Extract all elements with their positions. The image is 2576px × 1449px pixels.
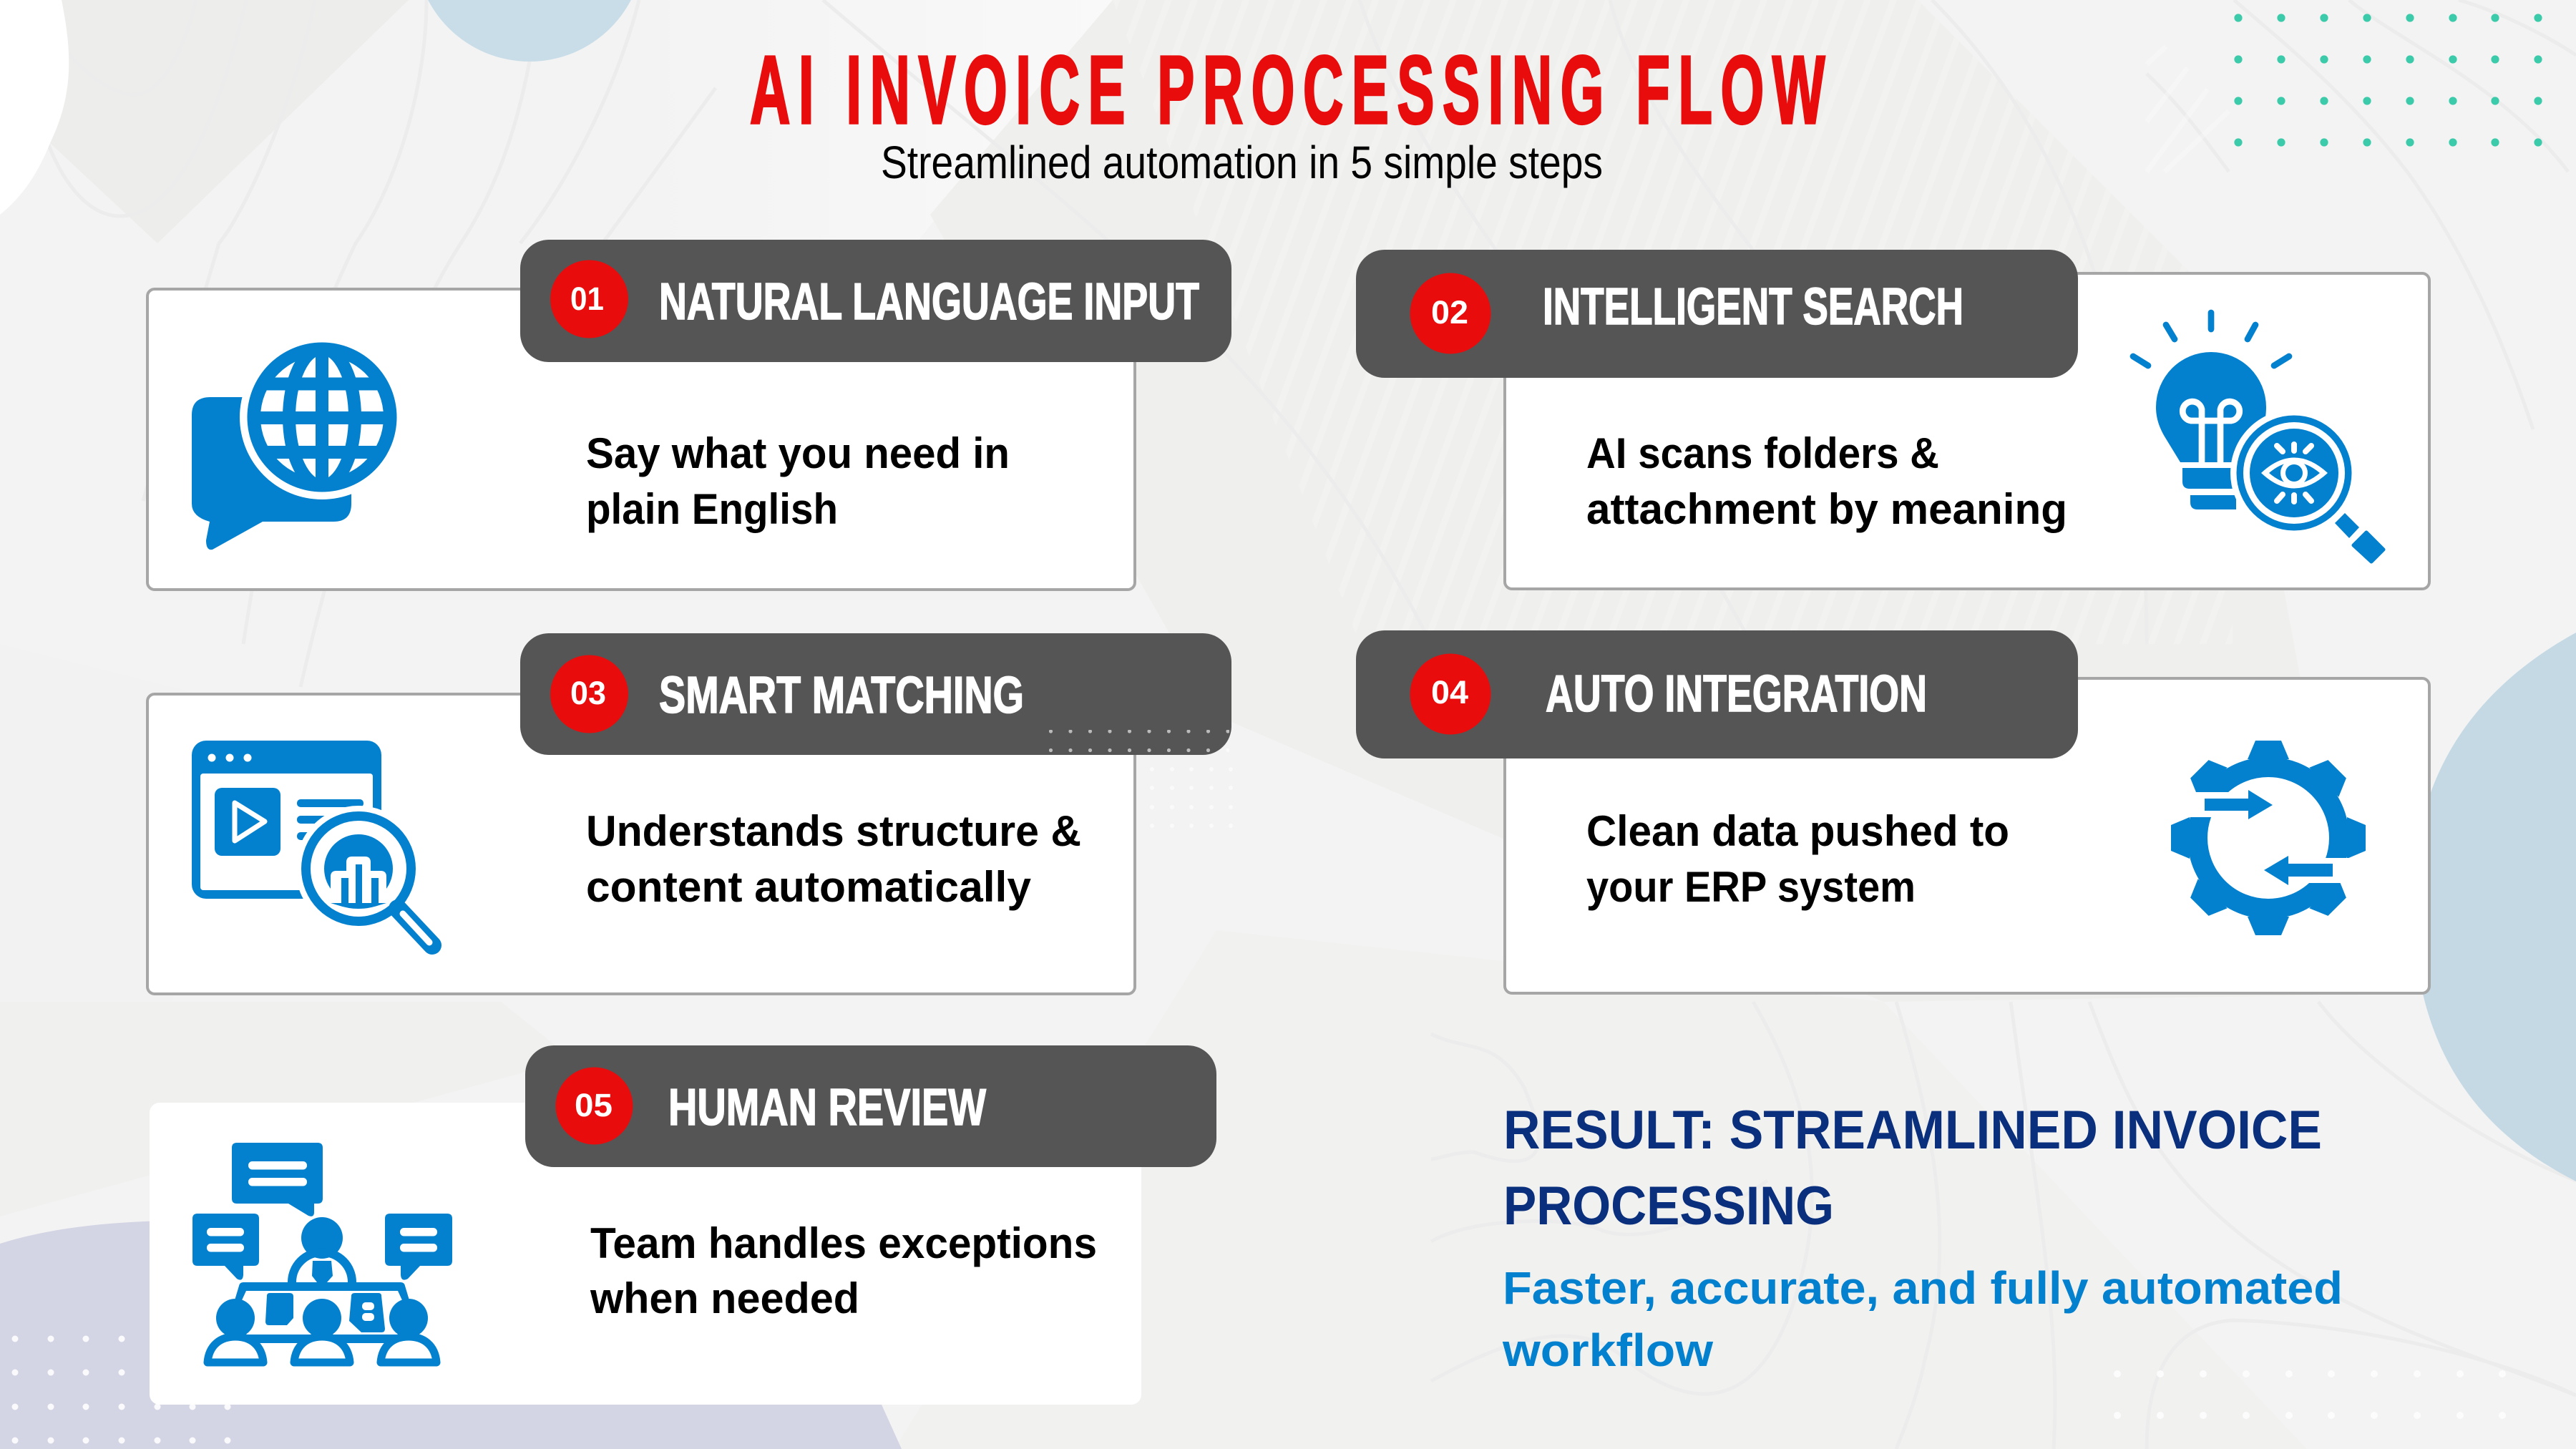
number: 03 <box>570 675 606 711</box>
dot grid: top-right teal <box>2234 14 2542 147</box>
title: AI INVOICE PROCESSING FLOW <box>750 36 1833 144</box>
number badge <box>1410 273 1491 353</box>
decorative blob: bottom-left lavender <box>0 1220 902 1449</box>
description: Say what you need in <box>586 429 1010 477</box>
dot grid: middle faint <box>1150 767 1233 828</box>
result description: Faster, accurate, and fully automated <box>1503 1262 2343 1314</box>
panel: step 04 auto integration <box>1356 630 2429 993</box>
number: 05 <box>575 1087 613 1123</box>
heading: AUTO INTEGRATION <box>1546 665 1927 723</box>
heading: SMART MATCHING <box>659 666 1024 724</box>
result description <box>1502 1262 2343 1376</box>
description line 2: plain English <box>586 485 838 533</box>
heading pill <box>520 633 1231 755</box>
dot grid: bottom-right faint <box>2114 1370 2506 1419</box>
heading: INTELLIGENT SEARCH <box>1543 278 1963 336</box>
card <box>150 1103 1141 1405</box>
heading pill <box>520 240 1231 362</box>
number: 02 <box>1431 294 1468 331</box>
result description: workflow <box>1502 1324 1713 1376</box>
icon: browser window with magnifier chart <box>192 741 432 945</box>
description: Clean data pushed to <box>1586 807 2009 855</box>
card <box>147 694 1135 994</box>
card <box>147 289 1135 590</box>
decorative blob: top-left white <box>0 0 69 215</box>
heading pill <box>1356 630 2078 758</box>
decorative blob: right blue <box>2413 633 2576 1181</box>
panel: step 05 human review <box>150 1045 1216 1405</box>
decorative blob: top blue circle <box>415 0 644 62</box>
description line 2: your ERP system <box>1586 863 1916 911</box>
icon: team meeting with speech bubbles <box>192 1143 452 1362</box>
description line 2: content automatically <box>586 863 1032 911</box>
number badge <box>550 260 628 338</box>
result heading <box>1503 1100 2322 1236</box>
icon: light bulb with magnifier eye <box>2133 313 2384 562</box>
dots over pill <box>1049 730 1229 753</box>
heading: HUMAN REVIEW <box>668 1078 986 1136</box>
panel: step 02 intelligent search <box>1356 250 2429 589</box>
description: Understands structure & <box>586 807 1081 855</box>
result heading: PROCESSING <box>1503 1176 1834 1236</box>
subtitle: Streamlined automation in 5 simple steps <box>881 137 1603 188</box>
card <box>1505 678 2429 993</box>
icon: speech bubble with globe <box>192 335 404 550</box>
panel: step 03 smart matching <box>147 633 1231 994</box>
number: 04 <box>1431 674 1468 711</box>
card <box>1505 273 2429 589</box>
number: 01 <box>570 280 604 317</box>
heading: NATURAL LANGUAGE INPUT <box>659 273 1199 331</box>
heading pill <box>525 1045 1216 1167</box>
dot grid: bottom-left white <box>11 1335 230 1444</box>
icon: gear with arrows <box>2168 741 2368 935</box>
result heading: RESULT: STREAMLINED INVOICE <box>1503 1100 2322 1161</box>
description line 2: when needed <box>590 1274 859 1322</box>
description: Team handles exceptions <box>590 1219 1097 1267</box>
description: AI scans folders & <box>1586 429 1939 477</box>
heading pill <box>1356 250 2078 378</box>
panel: step 01 natural language input <box>147 240 1231 590</box>
number badge <box>555 1068 633 1145</box>
description line 2: attachment by meaning <box>1586 485 2067 533</box>
number badge <box>1410 654 1491 734</box>
number badge <box>550 655 628 733</box>
